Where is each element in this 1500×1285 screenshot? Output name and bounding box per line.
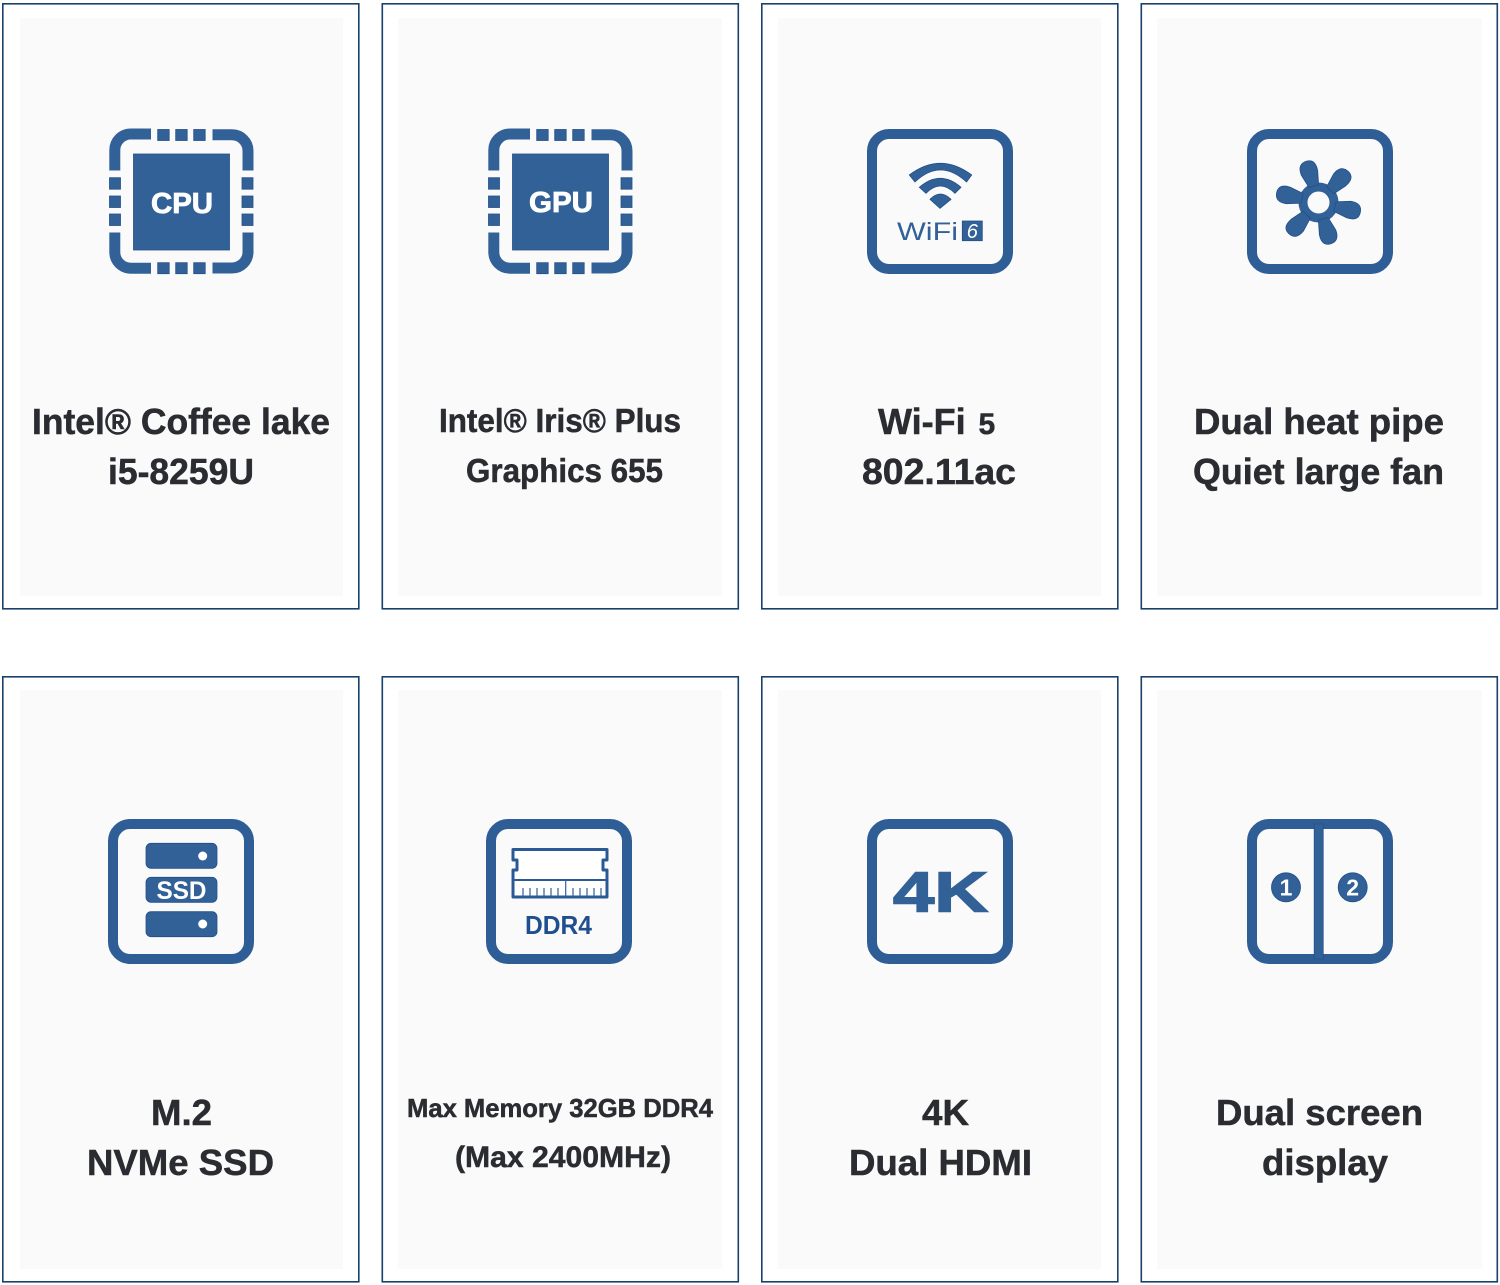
panel: GPU bbox=[382, 4, 738, 609]
icon: Wi-Fi bbox=[872, 134, 1008, 269]
icon: CPU chip: CPU bbox=[151, 188, 213, 220]
label: 4K: 4K bbox=[922, 1092, 969, 1133]
label: dual screen bbox=[1216, 1092, 1423, 1183]
icon: 4K bbox=[872, 824, 1008, 959]
label: CPU: i5-8259U bbox=[108, 451, 254, 492]
label: dual screen: Dual screen bbox=[1216, 1092, 1423, 1133]
label: 4K bbox=[849, 1092, 1032, 1183]
panel: CPU bbox=[3, 4, 359, 609]
label: SSD: NVMe SSD bbox=[87, 1142, 274, 1183]
label: memory: (Max 2400MHz) bbox=[455, 1141, 671, 1174]
icon: GPU chip bbox=[488, 130, 632, 274]
icon: GPU chip: GPU bbox=[529, 187, 593, 219]
icon: Wi-Fi: 6 bbox=[967, 221, 979, 243]
label: memory bbox=[407, 1093, 714, 1174]
panel: SSD bbox=[3, 677, 359, 1282]
label: Wi-Fi: Wi-Fi bbox=[878, 401, 966, 442]
icon: SSD: SSD bbox=[156, 877, 206, 905]
label: CPU: Intel® Coffee lake bbox=[32, 401, 330, 442]
icon: DDR4 bbox=[491, 824, 627, 959]
label: dual screen: display bbox=[1262, 1142, 1388, 1183]
label: cooling bbox=[1193, 401, 1444, 492]
label: GPU: Intel® Iris® Plus bbox=[439, 402, 681, 439]
label: Wi-Fi bbox=[862, 401, 1016, 492]
label: cooling: Dual heat pipe bbox=[1194, 401, 1444, 442]
label: SSD bbox=[87, 1092, 274, 1183]
panel: memory bbox=[382, 677, 738, 1282]
icon: fan bbox=[1252, 134, 1388, 269]
label: cooling: Quiet large fan bbox=[1193, 451, 1444, 492]
label: CPU bbox=[32, 401, 330, 492]
icon: 4K: 4K bbox=[893, 860, 988, 924]
label: SSD: M.2 bbox=[151, 1092, 212, 1133]
label: GPU bbox=[439, 402, 681, 489]
icon: dual screen: 2 bbox=[1346, 874, 1359, 900]
panel: Wi-Fi bbox=[762, 4, 1118, 609]
label: GPU: Graphics 655 bbox=[466, 452, 663, 489]
label: Wi-Fi: 802.11ac bbox=[862, 451, 1016, 492]
icon: DDR4: DDR4 bbox=[525, 910, 593, 940]
panel: dual screen bbox=[1141, 677, 1497, 1282]
label: Wi-Fi: 5 bbox=[978, 408, 995, 441]
icon: CPU chip bbox=[110, 130, 253, 274]
icon: dual screen bbox=[1252, 824, 1388, 959]
label: 4K: Dual HDMI bbox=[849, 1142, 1032, 1183]
panel: cooling bbox=[1141, 4, 1497, 609]
panel: 4K bbox=[762, 677, 1118, 1282]
icon: SSD bbox=[113, 824, 249, 959]
icon: Wi-Fi: WiFi bbox=[897, 218, 958, 246]
label: memory: Max Memory 32GB DDR4 bbox=[407, 1093, 714, 1123]
icon: dual screen: 1 bbox=[1280, 874, 1293, 900]
